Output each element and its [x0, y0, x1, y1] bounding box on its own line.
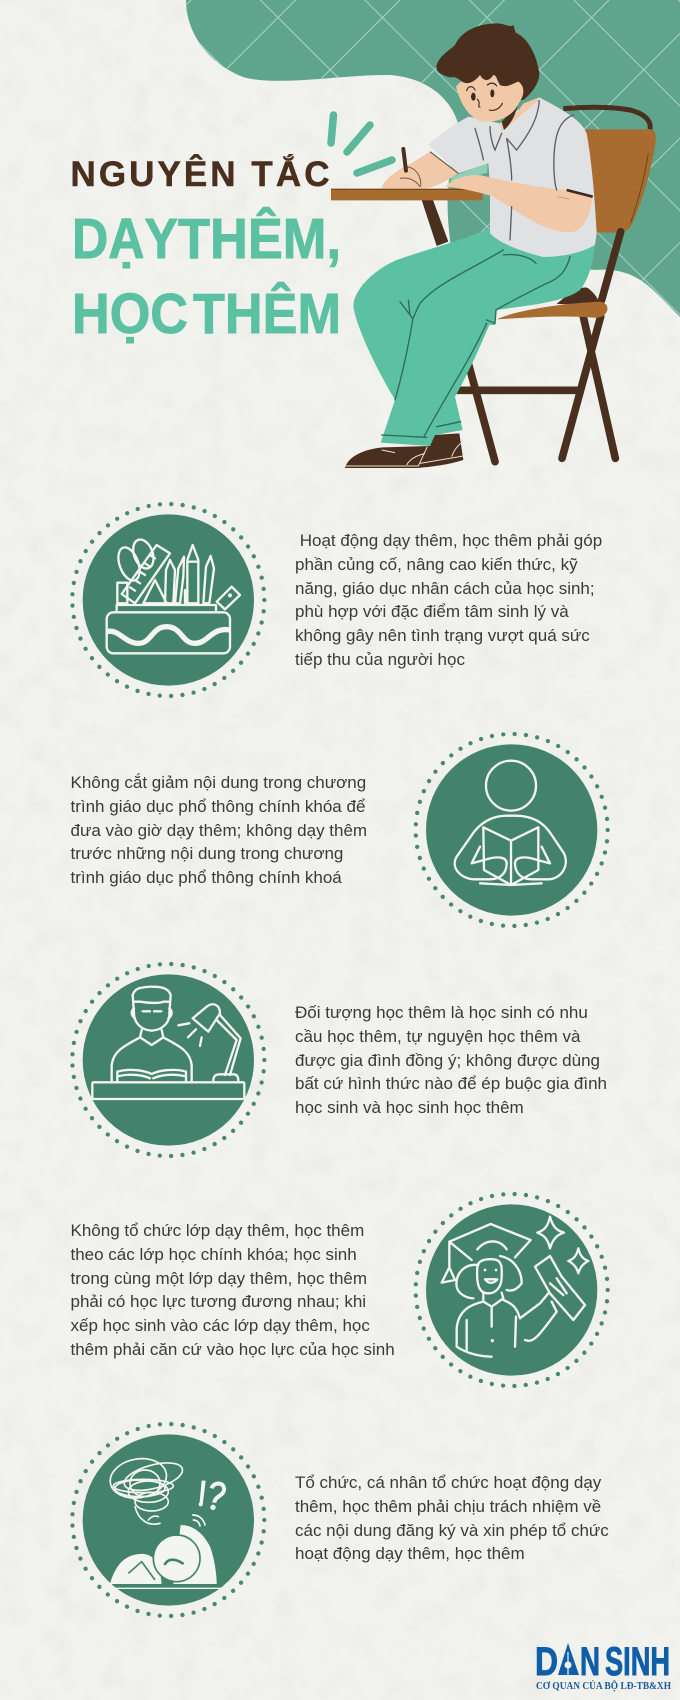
text: paragraph 2: Không cắt giảm nội dung trong chương trình giáo dục phổ thông chính khóa để đưa vào giờ dạy thêm; không dạy thêm trước những nội dung trong chương trình giáo dục phổ thông chính khoá	[70, 773, 367, 887]
title: HỌC THÊM: HỌC	[72, 282, 188, 345]
shirt, arms, head	[331, 23, 597, 257]
trousers and shoes	[345, 228, 595, 468]
resting arm	[445, 175, 593, 232]
logo: Dân Sinh: N	[580, 1640, 600, 1684]
table top	[331, 189, 483, 200]
writing arm	[382, 152, 458, 188]
panel 4: graduate and text	[70, 1192, 610, 1388]
panel 3: student at lamp and text	[70, 962, 607, 1158]
title: DẠY THÊM,: THÊM,	[178, 206, 341, 270]
panel 2: reader and text	[70, 732, 610, 928]
text: paragraph 3: Đối tượng học thêm là học sinh có nhu cầu học thêm, tự nguyện học thêm và được gia đình đồng ý; không được dùng bất cứ hình thức nào để ép buộc gia đình học sinh và học sinh học thêm	[295, 1003, 607, 1117]
header illustration: student at desk	[70, 0, 680, 468]
title: NGUYÊN TẮC: NGUYÊN TẮC	[70, 154, 330, 194]
pen	[403, 149, 406, 171]
neck	[500, 97, 539, 143]
icon: pen nib	[558, 1643, 579, 1675]
shirt lines	[475, 115, 573, 240]
title: HỌC THÊM	[72, 281, 341, 345]
hair	[436, 23, 539, 100]
icon: person reading	[414, 732, 610, 928]
student figure	[331, 23, 656, 468]
icon: student with desk lamp	[70, 962, 266, 1158]
title: HỌC THÊM: THÊM	[193, 281, 341, 345]
logo: Dân Sinh: D	[535, 1640, 558, 1684]
face details	[471, 93, 476, 101]
accent dashes	[331, 115, 392, 173]
face	[456, 74, 525, 122]
text: paragraph 4: Không tổ chức lớp dạy thêm, học thêm theo các lớp học chính khóa; học sinh trong cùng một lớp dạy thêm, học thêm phải có học lực tương đương nhau; khi xếp học sinh vào các lớp dạy thêm, học thêm phải căn cứ vào học lực của học sinh	[70, 1221, 395, 1359]
icon: pencil case	[70, 502, 266, 698]
text: paragraph 1: Hoạt động dạy thêm, học thêm phải góp phần củng cố, nâng cao kiến thức, kỹ năng, giáo dục nhân cách của học sinh; phù hợp với đặc điểm tâm sinh lý và không gây nên tình trạng vượt quá sức tiếp thu của người học	[295, 531, 602, 669]
logo: Dân Sinh	[535, 1640, 671, 1692]
icon: graduate with diploma	[414, 1192, 610, 1388]
green blob background	[186, 0, 680, 317]
text: paragraph 5: Tổ chức, cá nhân tổ chức hoạt động dạy thêm, học thêm phải chịu trách nhiệm về các nội dung đăng ký và xin phép tổ chức hoạt động dạy thêm, học thêm	[295, 1473, 609, 1563]
chair legs and table leg	[422, 200, 621, 462]
title: DẠY THÊM,	[72, 206, 341, 270]
panel 5: stressed student and text	[70, 1422, 609, 1618]
title: DẠY THÊM,: DẠY	[72, 207, 178, 270]
panel 1: pencil case and text	[70, 502, 602, 698]
icon: stressed student	[70, 1422, 266, 1618]
lattice lines on blob	[186, 0, 680, 316]
chair back	[563, 107, 656, 233]
